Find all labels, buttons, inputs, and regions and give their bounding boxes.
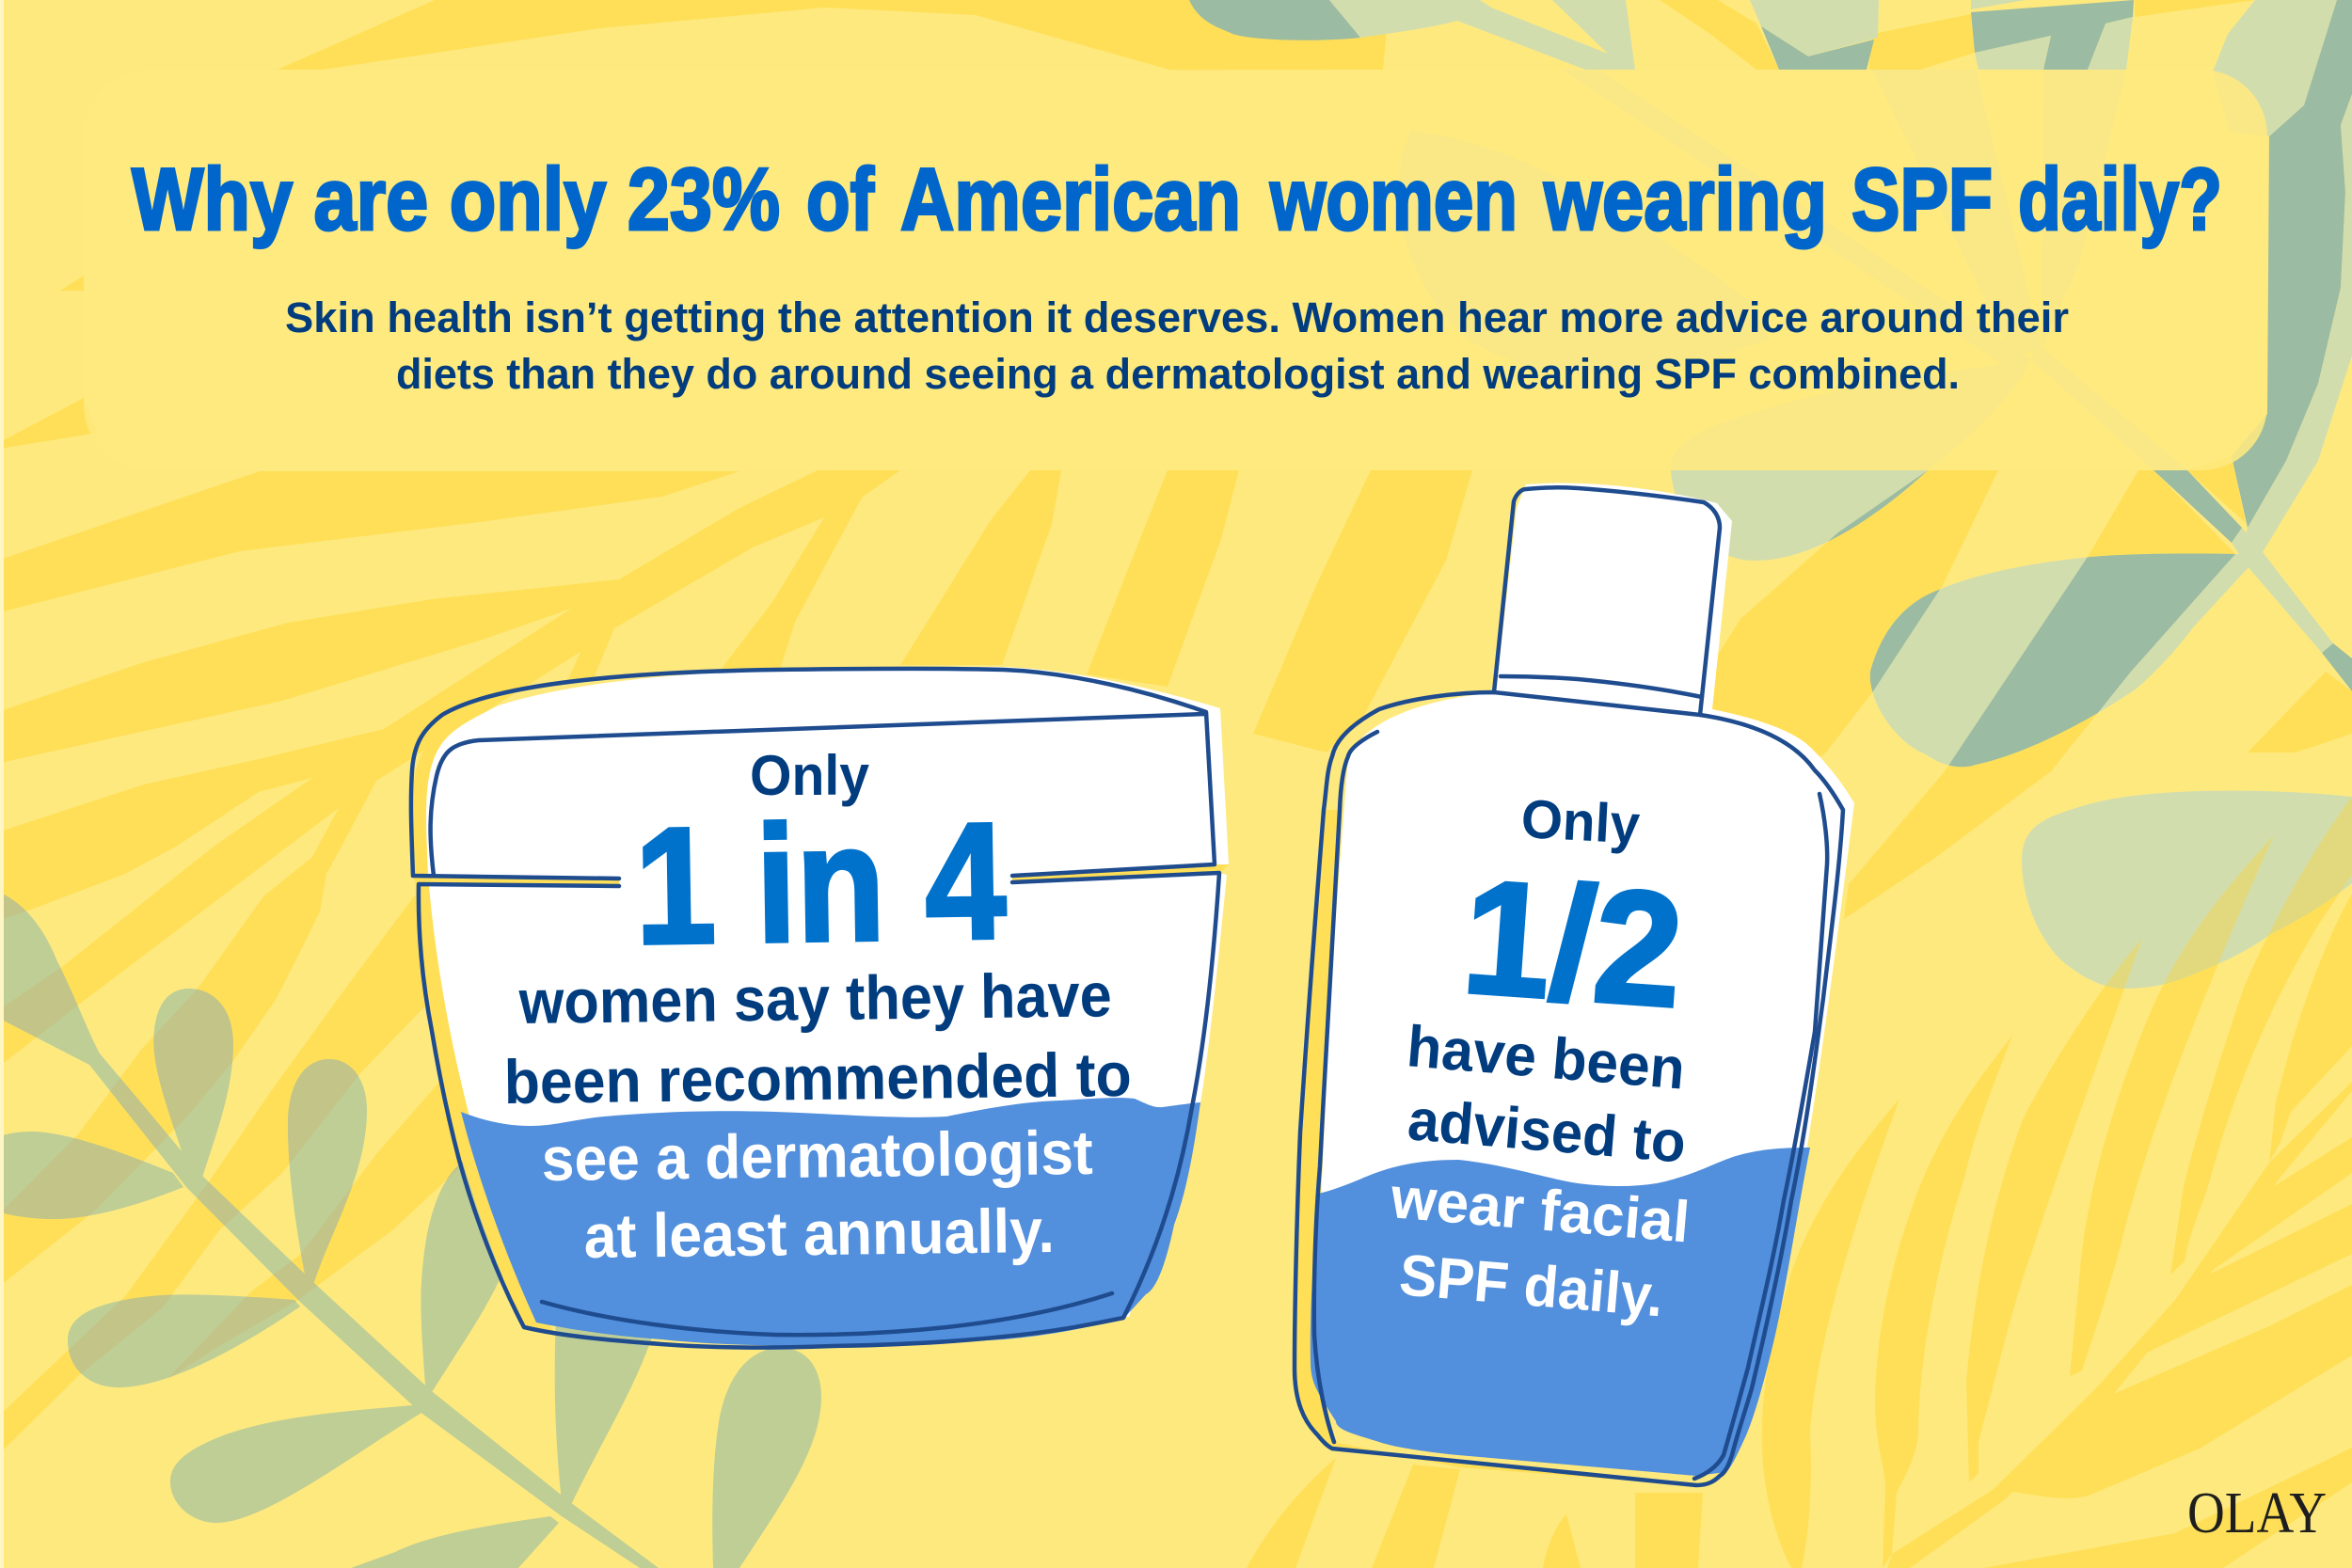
jar caption white	[541, 1117, 1093, 1271]
header panel	[84, 70, 2267, 470]
title: American	[900, 150, 1241, 248]
teardrop leaf	[1870, 553, 2239, 768]
title: SPF	[1851, 150, 1993, 248]
jar caption dark	[503, 959, 1132, 1117]
jar outlines	[411, 669, 1219, 1348]
logo: OLAY: OLAY	[2187, 1481, 2327, 1545]
jar text: Only: Only	[750, 744, 870, 807]
palm fronds left	[0, 0, 1472, 1453]
jar: 1 in 4 women	[411, 667, 1231, 1348]
jar white body	[426, 667, 1229, 1317]
center right leaf	[2022, 790, 2352, 989]
title	[132, 150, 2222, 248]
subtitle	[285, 293, 2069, 398]
bottle caption dark	[1405, 1014, 1689, 1176]
jar caption dark: been recommended to	[503, 1039, 1132, 1117]
title: daily?	[2018, 150, 2222, 248]
jar caption dark: women say they have	[517, 959, 1112, 1037]
jar blue fill	[461, 1098, 1200, 1346]
bottle outlines	[1295, 487, 1843, 1485]
bottle text: Only: Only	[1519, 788, 1642, 856]
subtitle: diets than they do around seeing a dermatologist and wearing SPF combined.	[396, 350, 1960, 398]
left edge sliver	[0, 0, 4, 1568]
bottle yellow shadow	[1295, 810, 1693, 1485]
bottle stat: 1/2: 1/2	[1457, 846, 1688, 1041]
bottle: 1/2 advised	[1295, 483, 1854, 1485]
jar stat: 1 in 4: 1 in 4	[634, 789, 1008, 979]
jar caption white: see a dermatologist	[541, 1117, 1093, 1194]
title: Why are only 23%	[132, 150, 780, 248]
title: wearing	[1543, 150, 1827, 248]
bottle caption dark: advised to	[1406, 1087, 1689, 1176]
subtitle: Skin health isn’t getting the attention it deserves. Women hear more advice around their	[285, 293, 2069, 341]
jar caption white: at least annually.	[583, 1196, 1055, 1271]
bottle white body	[1311, 483, 1854, 1472]
bottle caption dark: have been	[1405, 1014, 1688, 1102]
bottle blue fill	[1311, 1148, 1810, 1476]
palm fronds right	[1247, 0, 2352, 1568]
branch bottom left	[4, 895, 821, 1568]
title: of	[806, 150, 875, 248]
jar yellow shadow	[413, 705, 1231, 1336]
bottle caption white: wear facial	[1388, 1165, 1692, 1256]
bottle caption white	[1388, 1165, 1692, 1329]
leaves top right	[1189, 0, 2352, 691]
bottle caption white: SPF daily.	[1397, 1243, 1666, 1329]
title: women	[1269, 150, 1518, 248]
leaf under bottle	[1671, 470, 1928, 561]
